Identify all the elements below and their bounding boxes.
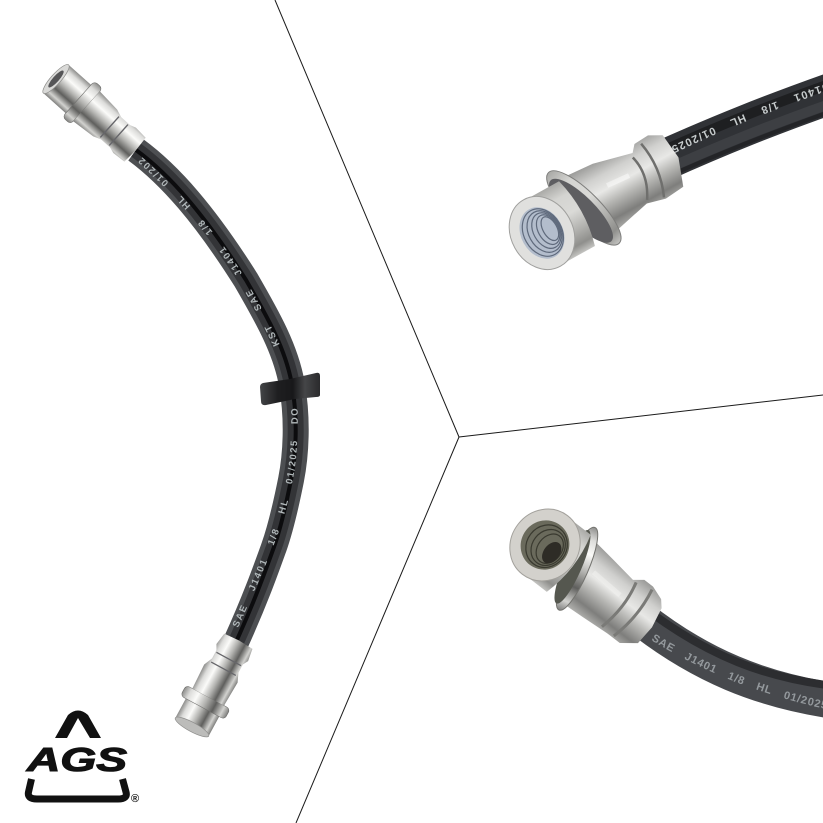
fitting opening — [496, 185, 588, 281]
hose body — [660, 82, 823, 180]
fitting opening — [495, 495, 595, 595]
bottom connector — [168, 629, 261, 743]
top connector — [36, 58, 152, 168]
logo: AGS — [26, 710, 139, 805]
logo base — [28, 779, 126, 799]
fitting — [489, 110, 703, 293]
fitting — [490, 487, 681, 664]
divider lines — [275, 0, 823, 823]
close-up: bottom right hose end — [509, 508, 823, 718]
hose clip — [260, 373, 320, 405]
hose markings lower: SAE J1401 1/8 HL 01/2025 DO — [232, 408, 298, 628]
close-up: top right hose end — [508, 74, 823, 270]
registered mark: ® — [131, 793, 139, 805]
hose body — [640, 612, 823, 701]
hose markings upper: KST SAE J1401 1/8 HL 01/202 — [138, 157, 280, 347]
logo wordmark: AGS — [26, 741, 127, 778]
hose body — [136, 150, 296, 642]
logo chevron — [55, 710, 101, 738]
hose: full assembly view — [42, 64, 320, 738]
